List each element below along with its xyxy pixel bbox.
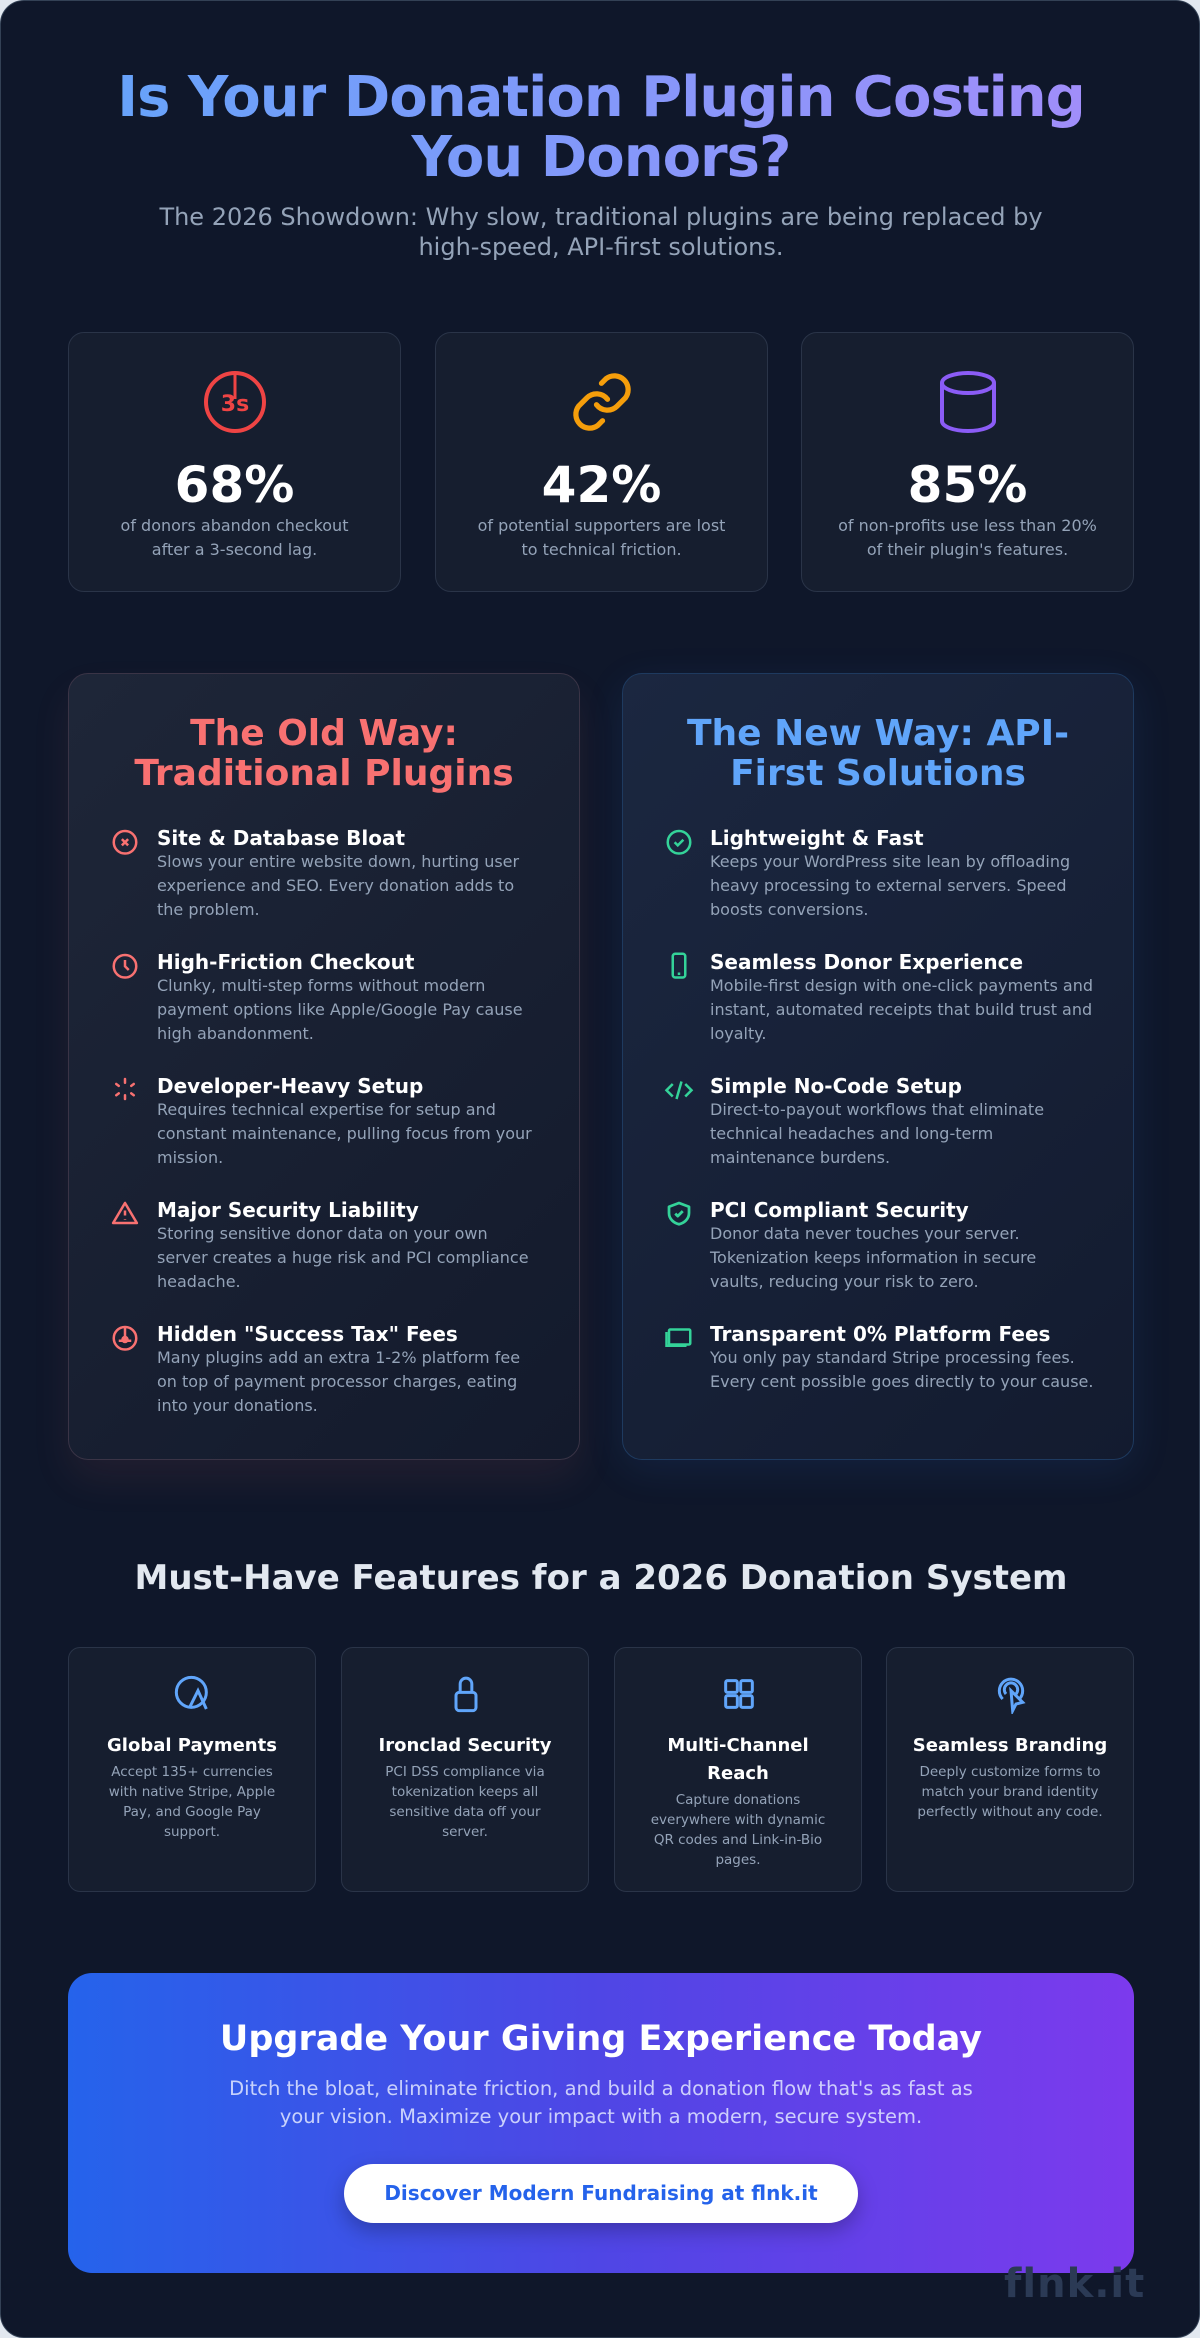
item: hidden fees: Many plugins add an extra 1-2% platform fee on top of payment processor charges, eating into your donations. (157, 1348, 520, 1415)
heading: new way: First Solutions (730, 753, 1026, 794)
feature: multi-channel: Capture donations everywhere with dynamic QR codes and Link-in-Bio pages. (651, 1792, 825, 1868)
item: lightweight: Keeps your WordPress site lean by offloading heavy processing to external servers. Speed boosts conversions. (710, 852, 1070, 919)
item: no-code: Simple No-Code Setup (710, 1074, 962, 1098)
subtitle: The 2026 Showdown: Why slow, traditional plugins are being replaced by high-speed, API-first solutions. (159, 203, 1043, 261)
item: seamless donor: Mobile-first design with one-click payments and instant, automated receipts that build trust and loyalty. (710, 976, 1093, 1043)
feature: branding (886, 1647, 1134, 1892)
item: pci: Donor data never touches your server. Tokenization keeps information in secure vaults, reducing your risk to zero. (710, 1224, 1036, 1291)
stat card: 68%: after a 3-second lag. (152, 540, 317, 559)
stat card: 42%: to technical friction. (521, 540, 682, 559)
panel: new way (622, 673, 1134, 1460)
heading: old way (134, 713, 514, 794)
stat card: 85%: 85% (908, 456, 1027, 514)
panel: old way (68, 673, 580, 1460)
icon: chain link (573, 373, 631, 431)
feature: branding: Seamless Branding (913, 1735, 1107, 1756)
stat card: 68% (68, 332, 401, 592)
feature: global payments: Accept 135+ currencies with native Stripe, Apple Pay, and Google Pay support. (109, 1764, 275, 1840)
feature: security: PCI DSS compliance via tokenization keeps all sensitive data off your server. (385, 1764, 545, 1840)
item: 0% fees: You only pay standard Stripe processing fees. Every cent possible goes directly to your cause. (710, 1348, 1093, 1391)
feature: multi-channel (614, 1647, 862, 1892)
item: developer heavy: Requires technical expertise for setup and constant maintenance, pulling focus from your mission. (157, 1100, 532, 1167)
watermark: flnk.it (1004, 2261, 1145, 2307)
item: hidden fees: Hidden "Success Tax" Fees (157, 1322, 458, 1346)
item: no-code (664, 1074, 1044, 1167)
section heading: Must-Have Features for a 2026 Donation System (134, 1558, 1067, 1598)
cta heading: Upgrade Your Giving Experience Today (220, 2019, 982, 2059)
stat card: 85%: of their plugin's features. (867, 540, 1068, 559)
cta text: Ditch the bloat, eliminate friction, and build a donation flow that's as fast as your vision. Maximize your impact with a modern, secure system. (229, 2077, 973, 2128)
item: high friction (112, 950, 523, 1043)
feature: global payments: Global Payments (107, 1735, 277, 1756)
item: seamless donor (672, 950, 1093, 1043)
item: seamless donor: Seamless Donor Experience (710, 950, 1023, 974)
stat card: 42% (435, 332, 768, 592)
icon: timer 3s: 3s (221, 392, 249, 417)
heading: old way: Traditional Plugins (134, 753, 514, 794)
item: lightweight: Lightweight & Fast (710, 826, 924, 850)
call to action (68, 1973, 1134, 2273)
item: security liability: Major Security Liability (157, 1198, 419, 1222)
feature: security (341, 1647, 589, 1892)
item: developer heavy: Developer-Heavy Setup (157, 1074, 423, 1098)
item: developer heavy (114, 1074, 532, 1167)
item: high friction: Clunky, multi-step forms without modern payment options like Apple/Google Pay cause high abandonment. (157, 976, 523, 1043)
stat card: 42%: 42% (542, 456, 661, 514)
heading: new way (687, 713, 1069, 794)
stat card: 42%: of potential supporters are lost (478, 516, 725, 535)
item: security liability (112, 1198, 529, 1291)
feature: global payments (68, 1647, 316, 1892)
icon: globe (174, 1676, 208, 1710)
item: high friction: High-Friction Checkout (157, 950, 414, 974)
feature: security: Ironclad Security (379, 1735, 551, 1756)
cta button (344, 2164, 858, 2223)
title (1, 68, 1200, 188)
item: pci (668, 1198, 1036, 1291)
title: You Donors? (412, 125, 790, 190)
item: security liability: Storing sensitive donor data on your own server creates a huge risk and PCI compliance headache. (157, 1224, 529, 1291)
item: site bloat: Site & Database Bloat (157, 826, 405, 850)
icon: database (940, 371, 996, 433)
heading: old way: The Old Way: (190, 713, 458, 754)
feature: branding: Deeply customize forms to match your brand identity perfectly without any code. (917, 1764, 1103, 1820)
item: site bloat (112, 826, 520, 919)
stat card: 85% (801, 332, 1134, 592)
feature: multi-channel: Multi-Channel (667, 1735, 809, 1756)
title: Is Your Donation Plugin Costing (117, 65, 1085, 130)
item: 0% fees: Transparent 0% Platform Fees (710, 1322, 1050, 1346)
feature: multi-channel: Reach (707, 1763, 769, 1784)
stat card: 68%: of donors abandon checkout (121, 516, 348, 535)
icon: pointer (998, 1678, 1026, 1714)
stat card: 68%: 68% (175, 456, 294, 514)
cta button: Discover Modern Fundraising at flnk.it (384, 2181, 818, 2205)
stat card: 85%: of non-profits use less than 20% (838, 516, 1097, 535)
icon: lock (454, 1676, 478, 1712)
heading: new way: The New Way: API- (687, 713, 1069, 754)
item: no-code: Direct-to-payout workflows that eliminate technical headaches and long-term maintenance burdens. (710, 1100, 1044, 1167)
icon: timer 3s (204, 371, 266, 433)
item: site bloat: Slows your entire website down, hurting user experience and SEO. Every donation adds to the problem. (157, 852, 519, 919)
item: lightweight (666, 826, 1070, 919)
icon: grid (724, 1679, 754, 1709)
item: pci: PCI Compliant Security (710, 1198, 969, 1222)
item: 0% fees (665, 1322, 1093, 1391)
item: hidden fees (112, 1322, 520, 1415)
